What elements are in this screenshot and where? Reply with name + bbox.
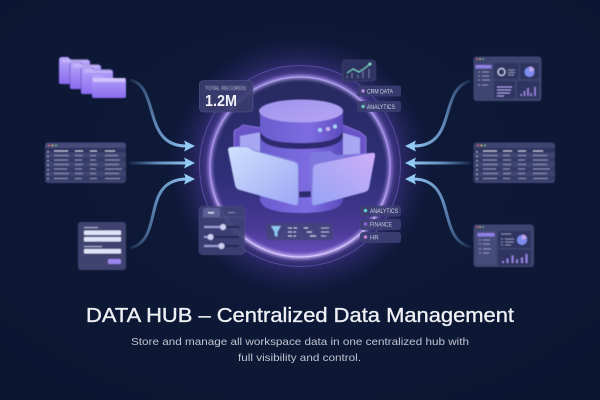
status dots <box>318 124 337 132</box>
tag: analytics bottom: ANALYTICS <box>370 209 398 215</box>
subtitle: Store and manage all workspace data in one centralized hub with <box>131 336 469 348</box>
arrow: table to hub <box>129 158 195 168</box>
icon: folder stack source <box>59 57 126 98</box>
tag: analytics top <box>357 101 401 112</box>
total records card <box>200 80 253 112</box>
tag: CRM data: CRM DATA <box>367 89 393 95</box>
tag: finance: FINANCE <box>370 222 392 228</box>
title: DATA HUB – Centralized Data Management <box>86 304 514 327</box>
database cylinder with folders <box>228 100 375 213</box>
subtitle <box>131 336 469 364</box>
tag: HR <box>360 232 401 243</box>
back folder frames <box>234 125 366 185</box>
tag: CRM data <box>357 86 401 96</box>
left folder <box>228 146 299 206</box>
filter sliders panel <box>199 206 244 254</box>
tag: finance <box>360 219 401 230</box>
right folder <box>310 151 375 206</box>
table output right <box>474 142 555 183</box>
cylinder top <box>259 100 343 122</box>
arrow: hub to table <box>405 158 471 168</box>
mini line chart card <box>342 60 376 81</box>
total records card: TOTAL RECORDS: <box>205 86 247 92</box>
total records card: 1.2M <box>205 93 237 110</box>
table source left <box>45 142 126 183</box>
arrow: hub to dashboard top <box>405 81 471 152</box>
dashboard output bottom right <box>474 224 534 267</box>
tag: analytics top: ANALYTICS <box>367 105 395 111</box>
arrow: folders to hub <box>130 80 195 152</box>
filter toolbar <box>266 223 333 240</box>
arrow: form to hub <box>130 174 195 248</box>
tag: HR: HR <box>370 235 379 241</box>
subtitle: full visibility and control. <box>238 352 361 364</box>
dashboard output top right <box>474 56 542 101</box>
form source <box>78 222 126 270</box>
arrow: hub to dashboard bottom <box>405 174 471 247</box>
cylinder body <box>260 111 343 213</box>
central hub glow and rings <box>170 36 430 296</box>
tag: analytics bottom <box>360 206 401 216</box>
